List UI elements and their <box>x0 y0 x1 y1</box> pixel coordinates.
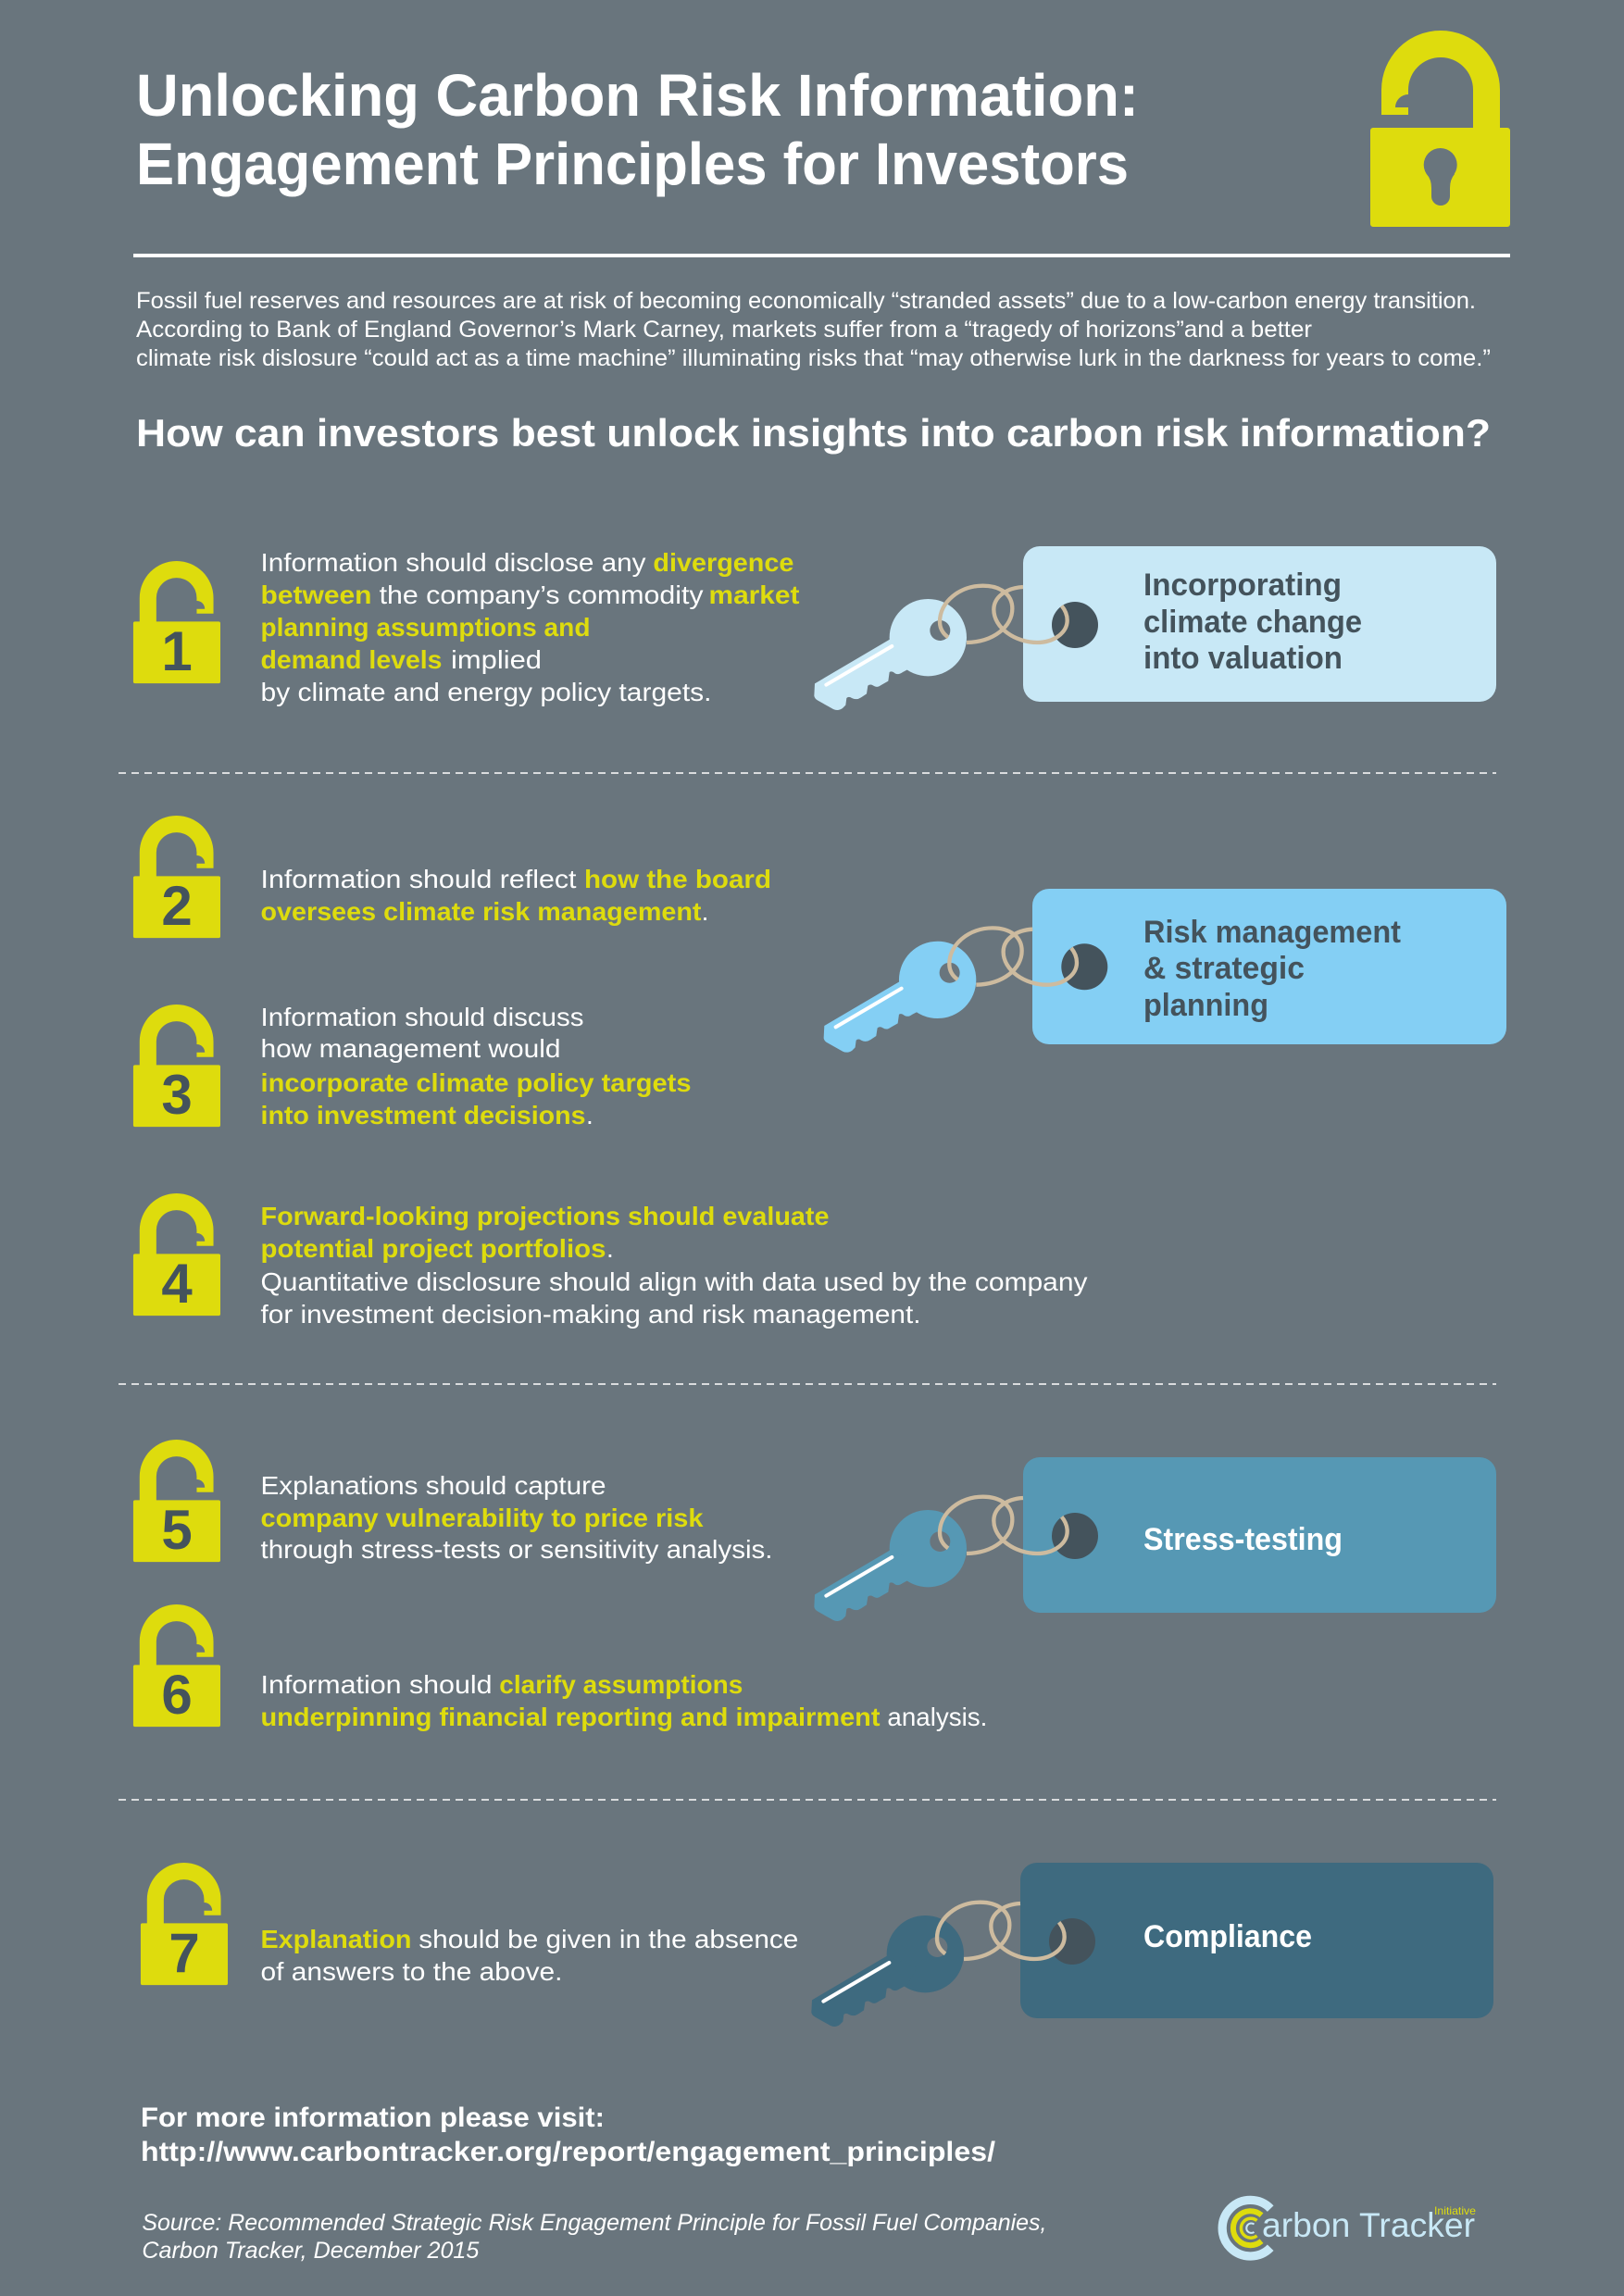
icon: key 1 <box>814 586 1068 710</box>
separator 3 <box>119 1799 1496 1801</box>
principle 1 lock <box>133 561 220 683</box>
principle 4 lock: 4 <box>161 1253 193 1315</box>
principle 2 lock <box>133 816 220 938</box>
principle 2 text <box>261 865 771 926</box>
heading: How can investors best unlock insights into carbon risk information? <box>136 411 1491 455</box>
principle 5 text: through stress-tests or sensitivity analysis. <box>261 1535 772 1564</box>
divider <box>133 254 1510 257</box>
principle 4 text: for investment decision-making and risk management. <box>261 1300 920 1329</box>
intro text: Fossil fuel reserves and resources are at risk of becoming economically “stranded assets” due to a low-carbon energy transition. <box>136 288 1476 314</box>
tag: incorporating climate change into valuation: Incorporating <box>1143 568 1342 603</box>
icon: key 4 <box>811 1903 1065 2027</box>
principle 4 text: . <box>606 1234 614 1263</box>
source note: Carbon Tracker, December 2015 <box>142 2238 479 2264</box>
principle 1 text: the company’s commodity <box>380 580 704 609</box>
principle 1 lock: 1 <box>161 620 193 682</box>
tag: risk management and strategic planning: & strategic <box>1143 951 1305 986</box>
tag: stress-testing: Stress-testing <box>1143 1522 1343 1557</box>
principle 3 text: incorporate climate policy targets <box>261 1068 691 1097</box>
principle 1 text: Information should disclose any <box>261 548 646 577</box>
separator 2 <box>119 1383 1496 1385</box>
principle 4 text: Quantitative disclosure should align with data used by the company <box>261 1267 1087 1296</box>
principle 5 text: company vulnerability to price risk <box>261 1504 704 1532</box>
principle 6 text: clarify assumptions <box>499 1670 743 1699</box>
tag: risk management and strategic planning: Risk management <box>1143 915 1401 950</box>
principle 6 lock <box>133 1604 220 1727</box>
intro text: climate risk dislosure “could act as a time machine” illuminating risks that “may otherwise lurk in the darkness for years to come.” <box>136 345 1491 371</box>
principle 1 text: by climate and energy policy targets. <box>261 678 711 706</box>
more information link <box>141 2103 996 2167</box>
more information link: http://www.carbontracker.org/report/engagement_principles/ <box>141 2137 996 2167</box>
tag: compliance <box>1020 1863 1493 2018</box>
principle 3 text: Information should discuss <box>261 1003 583 1031</box>
tag: stress-testing <box>1023 1457 1496 1613</box>
principle 3 lock <box>133 1004 220 1127</box>
principle 6 text: underpinning financial reporting and impairment <box>261 1703 880 1731</box>
principle 7 lock <box>141 1863 228 1985</box>
principle 2 lock: 2 <box>161 875 193 937</box>
tag: incorporating climate change into valuation: climate change <box>1143 605 1362 640</box>
tag: incorporating climate change into valuation <box>1023 546 1496 702</box>
principle 1 text: market <box>709 580 800 609</box>
principle 1 text: between <box>261 580 372 609</box>
more information link: For more information please visit: <box>141 2103 605 2133</box>
principle 2 text: . <box>702 897 708 926</box>
separator 1 <box>119 772 1496 774</box>
logo: Carbon Tracker <box>1222 2200 1476 2256</box>
tag: risk management and strategic planning: planning <box>1143 988 1268 1023</box>
principle 4 lock <box>133 1193 220 1316</box>
principle 6 text <box>261 1670 987 1731</box>
icon: large open padlock <box>1370 31 1510 227</box>
icon: key 3 <box>814 1497 1068 1621</box>
principle 1 text: demand levels <box>261 645 443 674</box>
logo: Carbon Tracker: Initiative <box>1434 2204 1476 2217</box>
principle 6 text: analysis. <box>887 1703 987 1731</box>
principle 3 text: . <box>586 1101 593 1129</box>
principle 6 lock: 6 <box>161 1664 193 1726</box>
principle 7 lock: 7 <box>169 1922 200 1984</box>
principle 6 text: Information should <box>261 1670 493 1699</box>
principle 5 lock: 5 <box>161 1499 193 1561</box>
principle 5 text <box>261 1471 772 1564</box>
source note <box>142 2210 1046 2264</box>
principle 7 text: Explanation <box>261 1925 411 1953</box>
tag: compliance: Compliance <box>1143 1919 1312 1954</box>
principle 3 text: how management would <box>261 1034 561 1063</box>
principle 2 text: Information should reflect <box>261 865 577 893</box>
principle 1 text: divergence <box>653 548 793 577</box>
principle 5 text: Explanations should capture <box>261 1471 606 1500</box>
intro text: According to Bank of England Governor’s Mark Carney, markets suffer from a “tragedy of horizons”and a better <box>136 317 1312 343</box>
principle 7 text: of answers to the above. <box>261 1957 563 1986</box>
principle 5 lock <box>133 1440 220 1562</box>
principle 3 lock: 3 <box>161 1064 193 1126</box>
title: Engagement Principles for Investors <box>136 131 1129 197</box>
tag: risk management and strategic planning <box>1032 889 1506 1044</box>
principle 7 text: should be given in the absence <box>418 1925 798 1953</box>
principle 1 text <box>261 548 800 706</box>
intro text <box>136 288 1491 371</box>
principle 1 text: planning assumptions and <box>261 613 591 642</box>
principle 3 text <box>261 1003 691 1129</box>
logo: Carbon Tracker: arbon Tracker <box>1262 2206 1475 2244</box>
principle 7 text <box>261 1925 798 1986</box>
principle 2 text: how the board <box>584 865 771 893</box>
principle 4 text: Forward-looking projections should evaluate <box>261 1202 830 1230</box>
principle 4 text: potential project portfolios <box>261 1234 606 1263</box>
title <box>136 62 1139 197</box>
principle 1 text: implied <box>451 645 542 674</box>
icon: key 2 <box>824 928 1077 1053</box>
principle 3 text: into investment decisions <box>261 1101 585 1129</box>
source note: Source: Recommended Strategic Risk Engagement Principle for Fossil Fuel Companies, <box>142 2210 1046 2236</box>
principle 4 text <box>261 1202 1087 1329</box>
tag: incorporating climate change into valuation: into valuation <box>1143 641 1343 676</box>
title: Unlocking Carbon Risk Information: <box>136 62 1139 129</box>
principle 2 text: oversees climate risk management <box>261 897 702 926</box>
